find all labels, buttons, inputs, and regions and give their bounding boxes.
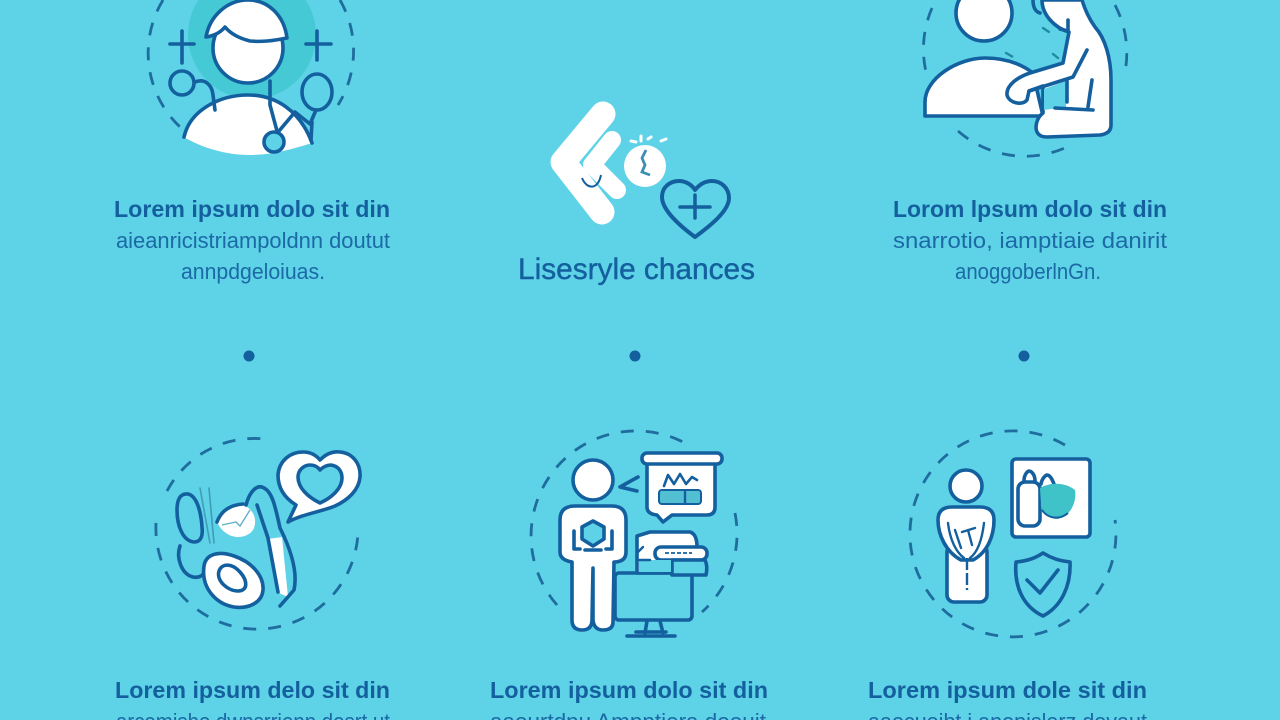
separator dots	[244, 350, 1030, 362]
heading: Lorem ipsum delo sit din	[115, 677, 390, 703]
icon: doctor with stethoscope	[148, 0, 354, 155]
heading: Lorom lpsum dolo sit din	[893, 196, 1167, 222]
icon: organs with heart speech bubble	[156, 438, 360, 629]
heading: Lorem ipsum dolo sit din	[490, 677, 768, 703]
icon: chevron, light bulb and heart	[563, 114, 729, 237]
icon: massage therapist and patient	[923, 0, 1127, 156]
text block	[116, 228, 390, 284]
icon: person with board and monitor	[531, 431, 737, 636]
icon: person with nutrition picture and shield	[910, 431, 1116, 637]
text block: annpdgeloiuas.	[181, 259, 325, 284]
text block: anoggoberlnGn.	[955, 259, 1101, 284]
text block: aieanricistriampoldnn doutut	[116, 228, 390, 253]
panel: protection (bottom right)	[868, 431, 1147, 720]
panel: massage (top right)	[893, 0, 1167, 284]
heading: lifestyle changes: Lisesryle chances	[518, 253, 755, 286]
text block: snarrotio, iamptiaie danirit	[893, 228, 1167, 253]
heading: Lorem ipsum dolo sit din	[114, 196, 390, 222]
panel: doctor (top left)	[114, 0, 390, 284]
text block	[893, 228, 1167, 284]
panel: digestive organs (bottom left)	[115, 438, 390, 720]
panel: presentation (bottom centre)	[490, 431, 768, 720]
heading: Lorem ipsum dole sit din	[868, 677, 1147, 703]
panel: lifestyle changes (centre)	[518, 114, 755, 286]
